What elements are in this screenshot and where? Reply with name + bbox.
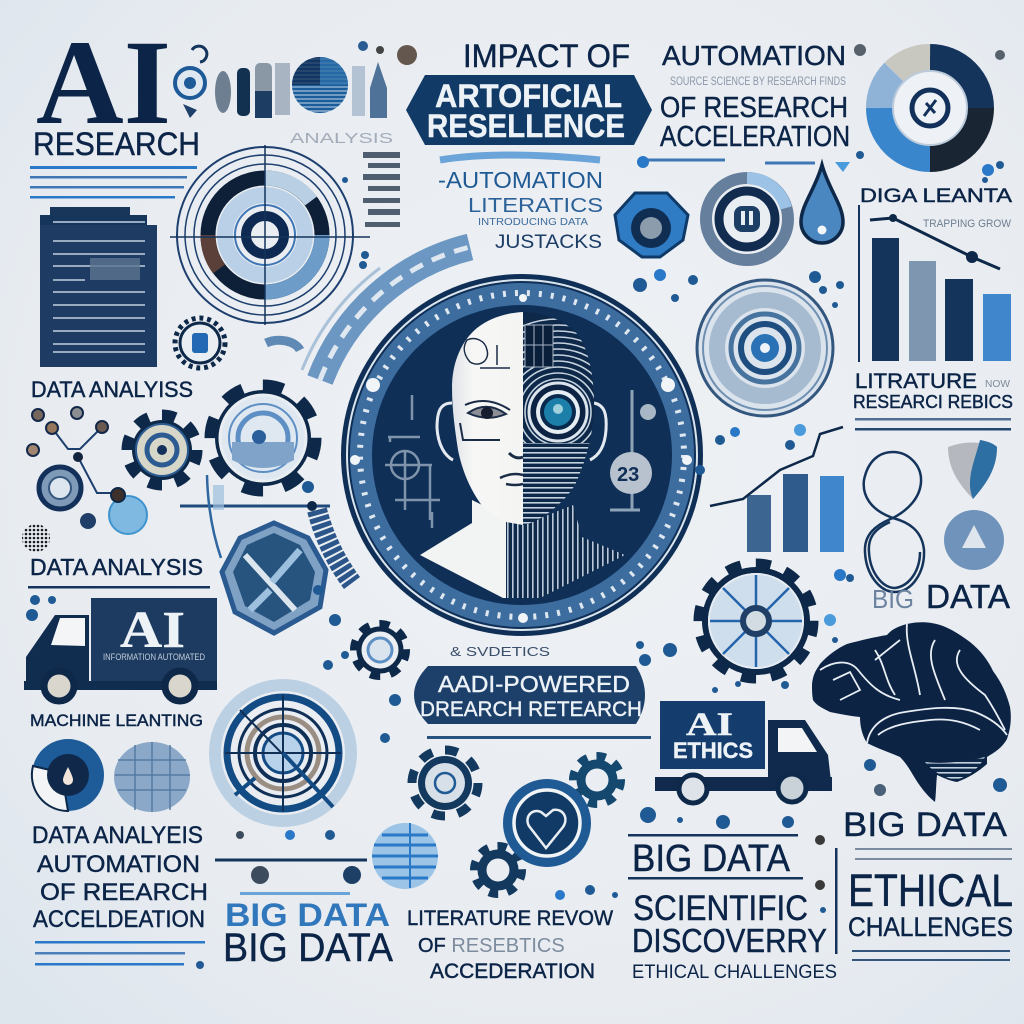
icon: AI truck: INFORMATION AUTOMATED	[103, 652, 205, 662]
title: AI Research	[30, 16, 200, 198]
label: literature review: OF RESEBTICS	[418, 935, 565, 957]
icon: large wheel gear	[700, 565, 812, 677]
label: literature research: NOW	[985, 379, 1011, 390]
pill: artificial intelligence	[406, 75, 652, 145]
label: literature review	[407, 907, 613, 983]
human facial features	[460, 339, 523, 485]
label: data analysis automation	[32, 822, 208, 966]
icon: gears	[127, 385, 316, 491]
eye: robot	[529, 383, 587, 441]
bar chart: top right: DIGA LEANTA	[860, 186, 1012, 207]
icon: right spiral dial	[697, 280, 833, 416]
pill: artificial intelligence: RESELLENCE	[427, 108, 625, 144]
label: big data scientific discovery: SCIENTIFIC	[633, 889, 808, 928]
circuit glyph right: 23	[617, 464, 639, 486]
icon: striped globe	[372, 823, 438, 889]
heading: impact of automation: ACCELERATION	[660, 121, 850, 153]
machine neck stripes	[506, 505, 625, 598]
human half of face	[452, 312, 523, 525]
label: big data right: DATA	[926, 578, 1010, 615]
label: literature research: RESEARCI REBICS	[853, 392, 1013, 412]
heading: impact of automation	[463, 38, 850, 153]
label: big data scientific discovery	[628, 834, 837, 983]
label: automation literature: LITERATICS	[468, 195, 603, 217]
icon: brain	[812, 622, 1011, 802]
icon: blue disc	[944, 510, 1004, 570]
label: big data scientific discovery: ETHICAL CHALLENGES	[632, 962, 837, 983]
label: AI-powered research: AADI-POWERED	[438, 671, 630, 697]
network nodes: data analysis	[27, 407, 147, 534]
central portrait: half human half robot	[341, 274, 703, 636]
heading: impact of automation: IMPACT OF	[463, 38, 630, 74]
title: AI Research: RESEARCH	[33, 126, 200, 162]
icon: top right donut chart	[885, 63, 975, 153]
icon: water drop	[801, 165, 843, 243]
icon: concentric target dial	[170, 145, 370, 325]
label: big data right	[872, 578, 1010, 615]
human shoulder and neck	[420, 500, 523, 598]
label: automation literature: JUSTACKS	[495, 232, 602, 253]
icon: segmented wheel	[706, 178, 788, 260]
icon: octagon emblem	[222, 523, 326, 633]
icon: ornate ribbon arc	[266, 247, 470, 380]
decorative blue line row	[440, 155, 850, 172]
connector with nodes lower left	[215, 830, 367, 895]
icon: lower target dial	[215, 685, 351, 821]
icon: document	[40, 207, 157, 367]
bar chart: center right	[710, 427, 844, 552]
circuit glyph left	[385, 395, 440, 528]
icon: map globe	[114, 742, 190, 812]
label: big data right: BIG	[872, 584, 914, 614]
label: data analysis automation: OF REEARCH	[40, 879, 208, 906]
label: literature review: ACCEDERATION	[430, 960, 595, 983]
icon: blue octagon	[615, 193, 688, 257]
icon: heart badge	[503, 779, 591, 867]
bar chart: top right	[858, 186, 1012, 362]
text: analysis faint label: ANALYSIS	[290, 130, 393, 147]
icon: AI ethics truck	[655, 701, 832, 803]
circuit glyph right	[610, 390, 656, 510]
label: data analysis automation: AUTOMATION	[37, 851, 200, 878]
white ring dots	[350, 294, 692, 623]
icon: center gears	[412, 750, 621, 894]
machine half of face	[523, 312, 594, 525]
label: data analysis 1: DATA ANALYISS	[31, 377, 193, 402]
ears	[437, 403, 606, 460]
heading: impact of automation: OF RESEARCH	[660, 92, 848, 124]
label: big data stack	[223, 897, 393, 970]
bar chart: top right: TRAPPING GROW	[923, 218, 1012, 230]
icon: shield	[948, 440, 997, 499]
ribbon: lower left arc	[317, 510, 352, 583]
label: automation literature: INTRODUCING DATA	[478, 217, 588, 228]
label: automation literature	[438, 167, 603, 253]
icon: small badge gear	[175, 318, 225, 368]
icon: AI truck: AI	[120, 602, 185, 659]
heading: impact of automation: SOURCE SCIENCE BY RESEARCH FINDS	[670, 74, 846, 88]
icon: speckled data pattern	[363, 152, 400, 227]
divider with node	[427, 736, 651, 739]
icon: top stripes and sphere row	[175, 41, 417, 118]
label: literature review: LITERATURE REVOW	[407, 907, 613, 930]
label: data analysis automation: ACCELDEATION	[33, 906, 205, 933]
label: big data scientific discovery: DISCOVERRY	[632, 922, 827, 959]
label: big data brain: BIG DATA	[843, 806, 1007, 844]
icon: AI truck	[24, 598, 217, 701]
title: AI Research: AI	[36, 16, 171, 150]
icon: halftone ball	[22, 524, 50, 552]
label: automation literature: -AUTOMATION	[438, 167, 603, 193]
icon: AI ethics truck: AI	[686, 707, 733, 743]
label: big data stack: BIG DATA	[225, 897, 390, 933]
label: AI-powered research: DREARCH RETEARCH	[420, 698, 642, 721]
pill: artificial intelligence: ARTOFICIAL	[435, 78, 622, 114]
heading: impact of automation: AUTOMATION	[662, 40, 846, 71]
label: literature research	[853, 370, 1013, 430]
icon: infinity loop	[864, 452, 924, 592]
label: data analysis 2: DATA ANALYSIS	[30, 554, 203, 580]
label: ethical challenges	[835, 848, 1013, 961]
faint label above pill: & SVDETICS	[450, 644, 550, 659]
label: AI-powered research	[414, 666, 645, 724]
label: literature research: LITRATURE	[855, 370, 977, 393]
icon: AI ethics truck: ETHICS	[673, 738, 753, 763]
label: machine learning: MACHINE LEANTING	[30, 711, 203, 730]
label: big data scientific discovery: BIG DATA	[632, 838, 791, 880]
connector line with node	[180, 475, 330, 558]
label: big data stack: BIG DATA	[223, 926, 393, 970]
icon: pie chart	[32, 739, 104, 811]
label: data analysis automation: DATA ANALYEIS	[32, 822, 203, 849]
icon: small gear near ring	[354, 624, 406, 676]
